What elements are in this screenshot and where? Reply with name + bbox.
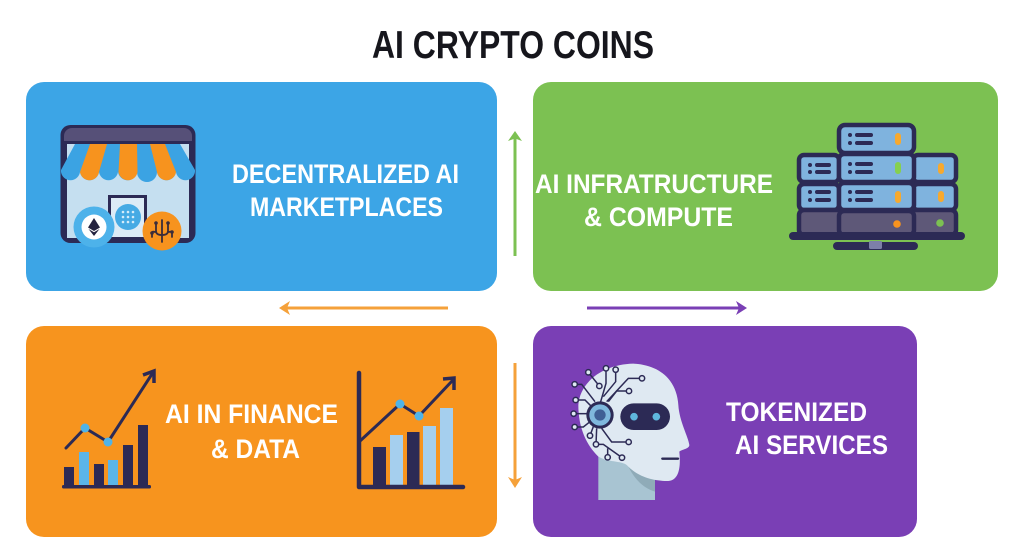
panel: AI in finance and data xyxy=(26,326,497,537)
panel: tokenized AI services xyxy=(533,326,917,537)
icon: AI head with circuits xyxy=(571,364,689,500)
arrow: green up xyxy=(508,131,522,256)
panel: decentralized AI marketplaces xyxy=(26,82,497,291)
panel heading: AI in finance and data: & DATA xyxy=(211,434,300,464)
arrow: purple right xyxy=(587,301,747,315)
icon: large growth chart xyxy=(359,373,463,487)
panel heading: AI infrastructure and compute: & COMPUTE xyxy=(584,202,733,232)
icon: storefront xyxy=(60,125,196,250)
icon: server rack xyxy=(789,125,965,250)
title: AI CRYPTO COINS xyxy=(372,24,654,67)
panel heading: AI in finance and data: AI IN FINANCE xyxy=(165,399,338,429)
panel heading: decentralized AI marketplaces: DECENTRALIZED AI xyxy=(232,159,459,189)
panel heading: tokenized AI services: TOKENIZED xyxy=(726,397,867,427)
panel heading: AI infrastructure and compute: AI INFRATRUCTURE xyxy=(535,169,773,199)
panel heading: tokenized AI services xyxy=(726,397,888,460)
arrow: orange down xyxy=(508,363,522,488)
panel heading: decentralized AI marketplaces xyxy=(232,159,459,222)
panel heading: AI in finance and data xyxy=(165,399,338,464)
icon: small growth chart xyxy=(62,371,154,488)
panel: AI infrastructure and compute xyxy=(533,82,998,291)
panel heading: decentralized AI marketplaces: MARKETPLACES xyxy=(250,192,443,222)
panel heading: AI infrastructure and compute xyxy=(535,169,773,232)
arrow: orange left xyxy=(279,301,448,315)
panel heading: tokenized AI services: AI SERVICES xyxy=(735,430,888,460)
